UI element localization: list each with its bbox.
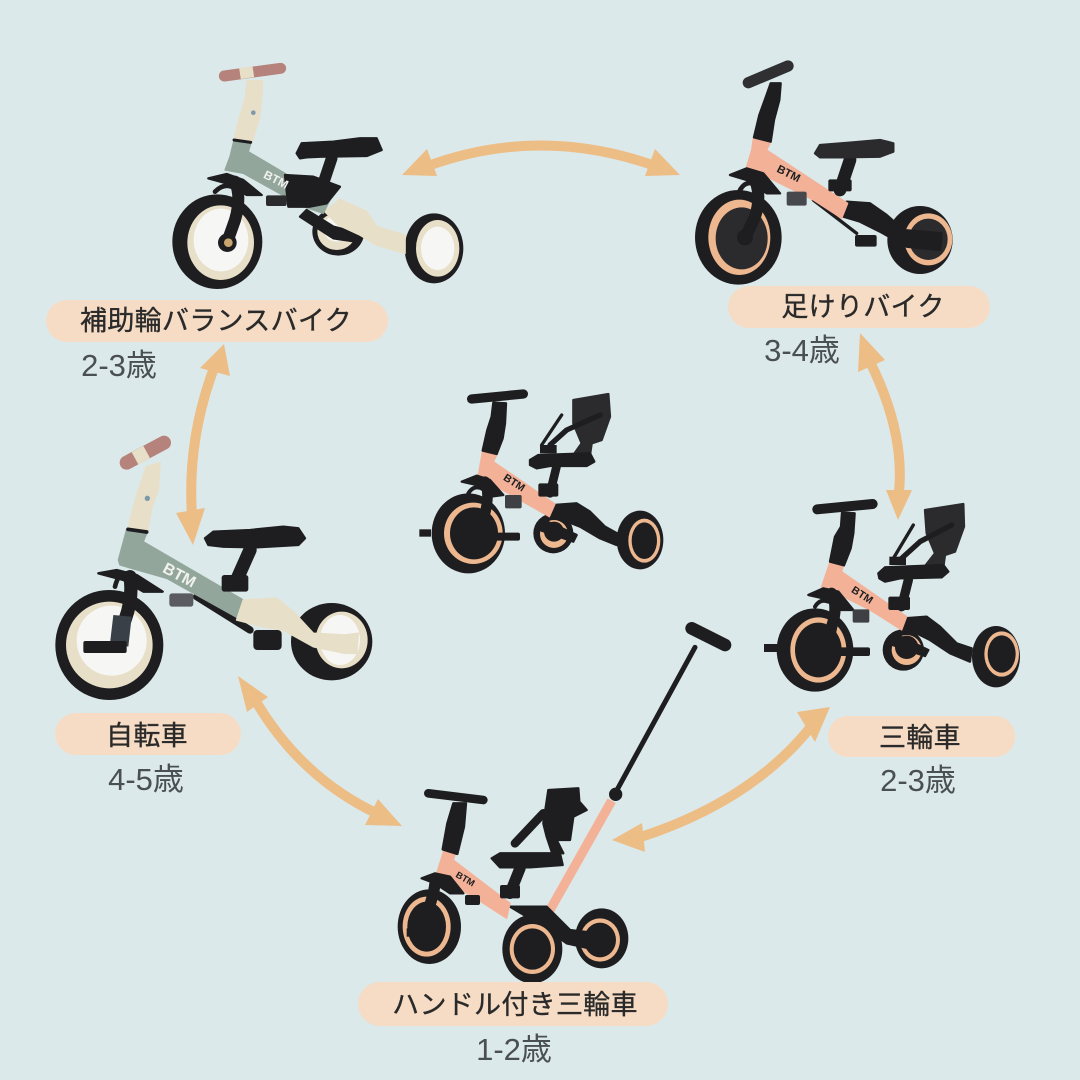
label: kick bike, 3-4 years: 3-4歳: [764, 333, 840, 368]
big rear wheel: [502, 915, 562, 983]
middle wheel: [883, 629, 924, 671]
bike: bottom pink tricycle with push handle: [398, 628, 725, 983]
label: tricycle with handle, 1-2 years: ハンドル付き三輪車: [392, 990, 638, 1020]
rear wheel: [617, 511, 663, 569]
stem: [128, 463, 160, 532]
frame: [478, 451, 555, 517]
pedal block: [169, 593, 193, 607]
logo: BTM: [160, 560, 198, 591]
front wheel: [695, 190, 782, 285]
frame: [822, 562, 907, 630]
frame: [437, 850, 510, 918]
front fork: [730, 168, 780, 245]
front wheel: [172, 194, 262, 289]
rear fork: [325, 199, 405, 253]
logo: BTM: [775, 163, 802, 185]
frame: [747, 138, 848, 218]
seat and backrest: [530, 394, 610, 497]
bike: right pink tricycle with backrest: [764, 504, 1020, 692]
label: balance bike with training wheels, 2-3 years: [46, 300, 388, 383]
logo: BTM: [501, 472, 527, 494]
bike: pink kick bike: [695, 66, 953, 285]
handlebar: [127, 443, 164, 463]
label: tricycle, 2-3 years: 三輪車: [879, 723, 961, 753]
lower pedal: [813, 200, 877, 247]
arrow: right upper, between kick bike and tricycle: [858, 333, 912, 520]
front fork: [208, 174, 262, 252]
label: bicycle, 4-5 years: [55, 713, 241, 797]
seat and backrest: [878, 504, 964, 610]
push bar: [550, 628, 725, 910]
rear wheel: [405, 213, 463, 283]
front wheel: [432, 493, 505, 573]
label: kick bike, 3-4 years: [728, 286, 990, 368]
stem: [443, 803, 466, 854]
bike: green balance bike with training wheels: [172, 68, 463, 289]
seat: [815, 140, 893, 191]
front fork and pedals: [764, 588, 870, 656]
rear fork: [902, 617, 972, 662]
handlebar: [817, 504, 873, 509]
stem: [754, 83, 781, 142]
third wheel: [575, 908, 628, 968]
rear wheel: [291, 603, 372, 680]
front fork and pedal: [407, 873, 480, 937]
pedal block: [505, 495, 522, 508]
bike: center pink tricycle with backrest: [419, 394, 663, 573]
middle wheel: [533, 513, 573, 553]
lower pedal: [300, 210, 360, 242]
arrow: bottom right, between push tricycle and tricycle: [612, 707, 830, 852]
label: tricycle, 2-3 years: [828, 716, 1015, 798]
seat: [205, 527, 305, 592]
front fork and pedals: [419, 476, 520, 542]
bike: green bicycle: [55, 443, 372, 700]
rear fork: [843, 202, 942, 250]
under tube and pedal: [197, 597, 282, 650]
label: kick bike, 3-4 years: 足けりバイク: [781, 292, 945, 322]
handlebar: [428, 793, 483, 800]
arrow: bottom left, between bicycle and push tricycle: [238, 676, 402, 826]
rear fork: [550, 503, 618, 545]
pedal block: [853, 609, 869, 623]
arrow: left upper, between balance bike and bicycle: [176, 344, 230, 545]
logo: BTM: [261, 168, 291, 192]
stem: [234, 81, 263, 143]
pedal block: [787, 192, 807, 206]
rear fork: [237, 598, 358, 653]
rear wheel: [972, 626, 1020, 687]
frame: [225, 140, 330, 213]
logo: BTM: [849, 584, 875, 607]
mid pedal: [540, 520, 577, 542]
seat: [297, 138, 382, 183]
stem: [830, 513, 855, 565]
label: tricycle with handle, 1-2 years: 1-2歳: [476, 1032, 552, 1067]
rear wheel: [887, 206, 953, 274]
small middle wheel: [312, 208, 364, 256]
logo: BTM: [454, 870, 477, 889]
label: tricycle, 2-3 years: 2-3歳: [880, 763, 956, 798]
front wheel: [398, 889, 461, 964]
handlebar: [224, 68, 281, 76]
handlebar: [748, 66, 788, 83]
arrow: top, between balance bike with training wheels and kick bike: [402, 146, 680, 176]
rear fork: [510, 907, 597, 950]
handlebar: [472, 394, 523, 399]
front wheel: [55, 590, 163, 700]
front wheel: [777, 608, 853, 692]
label: tricycle with handle, 1-2 years: [358, 982, 668, 1067]
label: balance bike with training wheels, 2-3 years: 2-3歳: [81, 348, 157, 383]
pedal block: [266, 175, 340, 207]
label: bicycle, 4-5 years: 自転車: [106, 721, 188, 751]
front fork: [83, 570, 163, 653]
label: bicycle, 4-5 years: 4-5歳: [108, 762, 184, 797]
seat and backrest: [492, 788, 587, 898]
label: balance bike with training wheels, 2-3 years: 補助輪バランスバイク: [80, 306, 352, 336]
mid pedal: [890, 633, 928, 656]
stem: [483, 403, 506, 454]
frame: [118, 529, 243, 618]
